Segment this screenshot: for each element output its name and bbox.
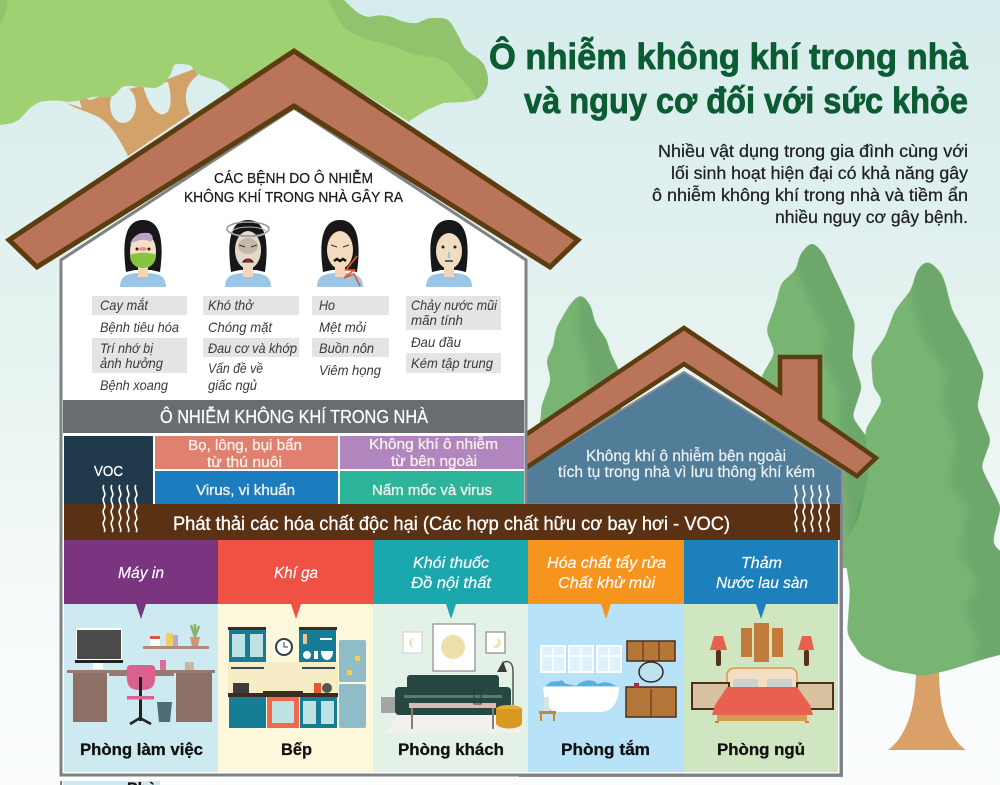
- source card: cleaning chemicals: Chất khử mùi: [558, 575, 655, 592]
- title: Ô nhiễm không khí trong nhà: [489, 35, 969, 77]
- symptoms list: column 4: Kém tập trung: [411, 355, 493, 371]
- symptoms list: column 1: Cay mắt: [100, 297, 149, 313]
- symptoms list: column 2: Khó thở: [208, 297, 254, 313]
- intro text: nhiều nguy cơ gây bệnh.: [775, 207, 968, 227]
- room panel backgrounds: [64, 604, 838, 772]
- second house text: Không khí ô nhiễm bên ngoài: [586, 448, 786, 465]
- symptoms list: column 3: Ho: [319, 297, 335, 313]
- panel: outdoor polluted air: [340, 436, 524, 470]
- symptoms list: column 2: [203, 296, 299, 393]
- intro text: Nhiều vật dụng trong gia đình cùng với: [658, 141, 968, 161]
- second house text: tích tụ trong nhà vì lưu thông khí kém: [558, 464, 815, 481]
- icon: woman dizzy: [225, 220, 271, 287]
- source card: printer: [64, 540, 218, 619]
- room names: Phòng khách: [398, 740, 504, 759]
- tree trunk: [888, 668, 966, 750]
- room names: [80, 740, 805, 759]
- illustration: bathroom: [539, 641, 676, 721]
- heading: diseases: CÁC BỆNH DO Ô NHIỄM: [214, 170, 373, 187]
- source card: cleaning chemicals: Hóa chất tẩy rửa: [547, 554, 666, 572]
- source card: smoke and furniture: [373, 540, 528, 619]
- symptoms list: column 2: giấc ngủ: [208, 377, 257, 393]
- room names: Bếp: [281, 740, 312, 759]
- main house roof: [9, 51, 578, 267]
- symptoms list: column 4: [406, 296, 501, 373]
- panel: outdoor polluted air: từ bên ngoài: [391, 453, 477, 470]
- tree foliage: [843, 260, 1000, 676]
- second house text: [558, 448, 815, 481]
- banner: indoor air pollution: Ô NHIỄM KHÔNG KHÍ TRONG NHÀ: [160, 406, 428, 427]
- source card: smoke and furniture: Khói thuốc: [413, 555, 489, 572]
- banner: toxic chemical emissions: [64, 504, 840, 540]
- illustration: kitchen: [228, 627, 366, 728]
- panel: outdoor polluted air: Không khí ô nhiễm: [369, 436, 498, 453]
- panel: pets: Bọ, lông, bụi bẩn: [188, 437, 302, 454]
- illustration: office: [67, 624, 215, 724]
- icon: woman coughing: [317, 220, 363, 287]
- source card: smoke and furniture: Đồ nội thất: [411, 575, 492, 592]
- illustration: large tree behind main house: [0, 0, 488, 156]
- symptoms list: column 1: Bệnh xoang: [100, 377, 168, 393]
- second house roof with chimney: [515, 328, 876, 476]
- icon: vapour waves right: [795, 485, 829, 532]
- symptoms list: column 1: [92, 296, 187, 393]
- illustration: medium tree behind second house: [761, 241, 876, 568]
- room names: Phòng tắm: [561, 740, 650, 759]
- symptoms list: column 1: ảnh hưởng: [100, 355, 163, 371]
- source card: carpet and floor cleaner: [684, 540, 838, 619]
- symptoms list: column 3: Mệt mỏi: [319, 319, 367, 335]
- banner: indoor air pollution: [63, 400, 524, 433]
- illustration: large foreground tree: [843, 260, 1000, 750]
- source card: printer: Máy in: [118, 565, 164, 582]
- panel: VOC: VOC: [94, 463, 123, 480]
- panel: VOC: [64, 436, 153, 506]
- symptoms list: column 2: Đau cơ và khớp: [208, 340, 297, 356]
- room names: Phòng ngủ: [717, 740, 805, 759]
- illustration: overlap of tree foliage: [850, 489, 872, 564]
- symptoms list: column 1: Trí nhớ bị: [100, 340, 154, 356]
- panel: mould and virus: Nấm mốc và virus: [372, 482, 492, 499]
- panel: mould and virus: [340, 471, 524, 505]
- main house body: [61, 108, 841, 775]
- symptoms list: column 4: Đau đầu: [411, 334, 461, 350]
- illustration: bedroom: [692, 623, 833, 723]
- icon: woman runny nose: [426, 220, 472, 287]
- source card: gas: Khí ga: [274, 565, 318, 582]
- source card: carpet and floor cleaner: Thảm: [741, 555, 782, 572]
- panel: pets: [155, 436, 338, 471]
- illustration: small tree behind second house: [531, 293, 624, 460]
- symptoms list: column 4: mãn tính: [411, 312, 463, 328]
- symptoms list: column 3: Buồn nôn: [319, 340, 374, 356]
- icon: vapour waves left: [103, 485, 137, 532]
- source card: cleaning chemicals: [528, 540, 684, 619]
- symptoms list: column 1: Bệnh tiêu hóa: [100, 319, 179, 335]
- source card: gas: [218, 540, 373, 619]
- symptoms list: column 3: [312, 296, 389, 378]
- source card: carpet and floor cleaner: Nước lau sàn: [716, 575, 808, 592]
- second house wall: [520, 372, 842, 776]
- title: [489, 35, 969, 121]
- icon: woman with mask: [120, 220, 166, 287]
- symptoms list: column 2: Vấn đề về: [208, 360, 263, 376]
- panel: virus and bacteria: Virus, vi khuẩn: [196, 482, 295, 499]
- banner: toxic chemical emissions: Phát thải các hóa chất độc hại (Các hợp chất hữu cơ bay hơi - VOC): [173, 514, 730, 535]
- panel: pets: từ thú nuôi: [207, 454, 282, 471]
- symptoms list: column 4: Chảy nước mũi: [411, 297, 498, 313]
- intro text: lối sinh hoạt hiện đại có khả năng gây: [671, 163, 968, 183]
- intro text: ô nhiễm không khí trong nhà và tiềm ẩn: [652, 184, 968, 205]
- panel: virus and bacteria: [155, 471, 338, 505]
- illustration: living room: [381, 624, 522, 733]
- heading: diseases: [184, 170, 403, 206]
- heading: diseases: KHÔNG KHÍ TRONG NHÀ GÂY RA: [184, 189, 403, 206]
- intro text: [652, 141, 968, 227]
- cropped next section fragment: [60, 779, 160, 785]
- symptoms list: column 3: Viêm họng: [319, 362, 381, 378]
- room names: Phòng làm việc: [80, 740, 203, 759]
- symptoms list: column 2: Chóng mặt: [208, 319, 273, 335]
